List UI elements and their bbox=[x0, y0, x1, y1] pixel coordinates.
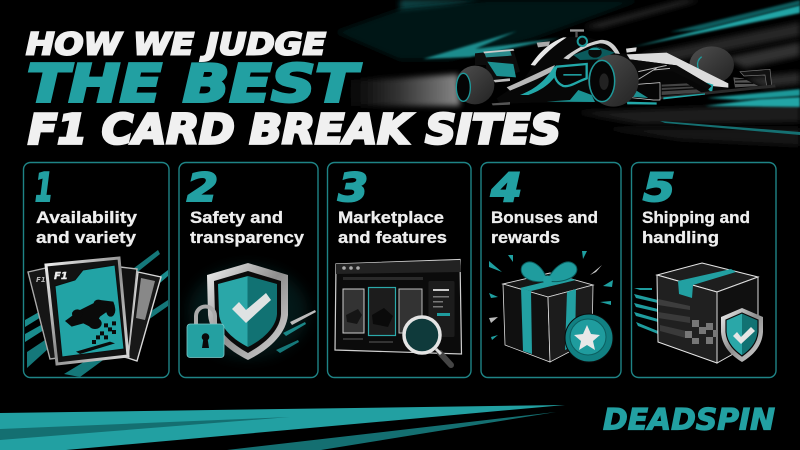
panel: safety and transparency bbox=[179, 162, 318, 378]
panel: marketplace and features bbox=[328, 162, 471, 378]
car body bbox=[475, 29, 728, 105]
rear wheel bbox=[456, 66, 494, 104]
number 4: 4 bbox=[490, 166, 522, 211]
label: and features bbox=[338, 229, 447, 247]
icon: F1 trading cards: F1 bbox=[36, 276, 46, 284]
label: Marketplace bbox=[338, 209, 444, 227]
number 5: 5 bbox=[643, 166, 675, 211]
title bbox=[26, 28, 561, 154]
title line 3: F1 CARD BREAK SITES bbox=[28, 106, 561, 154]
panel: availability and variety bbox=[24, 162, 169, 378]
front wheel bbox=[588, 55, 639, 107]
label: and variety bbox=[36, 229, 137, 247]
title line 2: THE BEST bbox=[27, 54, 361, 114]
far front wheel bbox=[689, 46, 734, 84]
label: transparency bbox=[190, 229, 305, 247]
label: rewards bbox=[491, 229, 560, 247]
icon: shipping box with shield bbox=[634, 263, 763, 363]
label: Bonuses and bbox=[491, 209, 598, 227]
number 2: 2 bbox=[187, 166, 218, 211]
label: Availability bbox=[36, 209, 138, 227]
speed streak background bbox=[335, 0, 800, 146]
panel: bonuses and rewards bbox=[481, 162, 621, 378]
F1 race car illustration bbox=[456, 29, 776, 107]
icon: shield and padlock bbox=[187, 263, 316, 360]
label: handling bbox=[642, 229, 719, 247]
label: Safety and bbox=[190, 209, 283, 227]
panel: shipping and handling bbox=[632, 162, 776, 378]
number 1: 1 bbox=[35, 166, 53, 211]
label: Shipping and bbox=[642, 209, 750, 227]
bottom speed stripes bbox=[0, 405, 565, 450]
card car silhouette bbox=[65, 300, 116, 354]
number 3: 3 bbox=[338, 166, 368, 211]
title line 1: HOW WE JUDGE bbox=[26, 28, 327, 62]
icon: F1 trading cards: F1 bbox=[54, 271, 68, 282]
icon: marketplace browser with magnifier bbox=[335, 260, 462, 365]
logo: Deadspin: DEADSPIN bbox=[603, 402, 775, 436]
icon: F1 trading cards bbox=[25, 250, 168, 377]
icon: gift box and star coin bbox=[489, 251, 613, 362]
front wing bbox=[627, 69, 776, 105]
